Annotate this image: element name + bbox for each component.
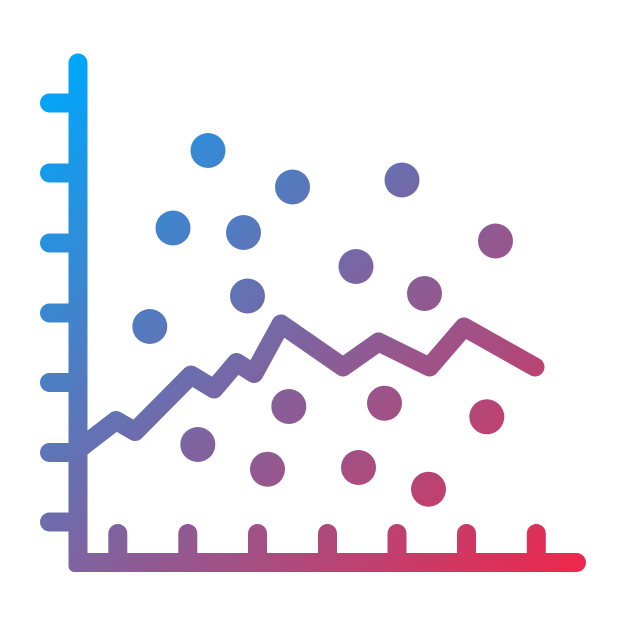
axes — [68, 54, 586, 572]
trend line — [79, 324, 535, 449]
scatter points — [132, 133, 513, 507]
y axis ticks — [50, 103, 76, 522]
x axis ticks — [118, 534, 536, 560]
